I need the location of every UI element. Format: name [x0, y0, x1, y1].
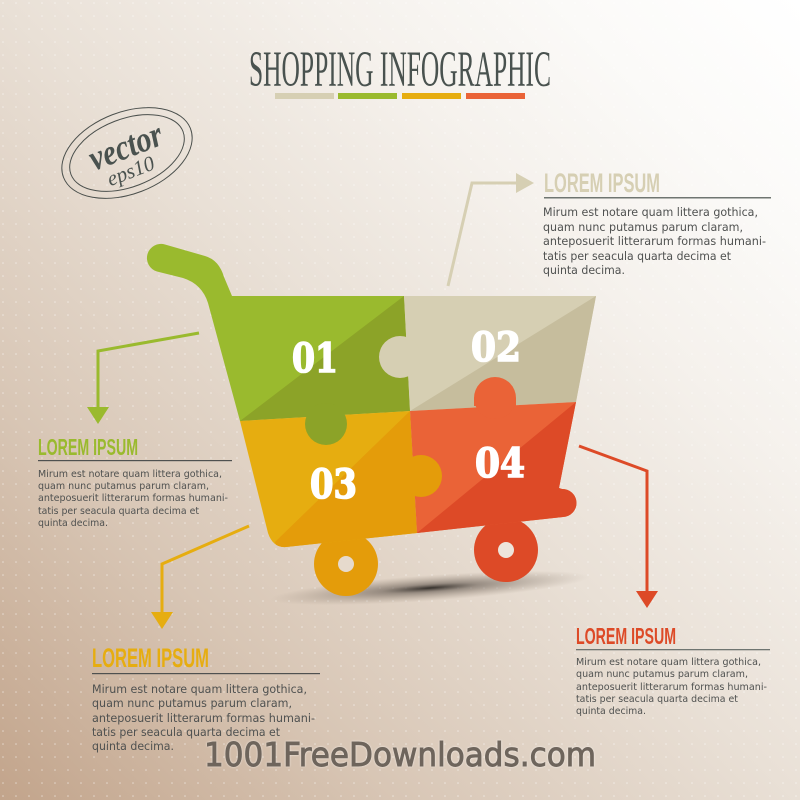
panel: beige text block: [543, 168, 771, 277]
body text: quinta decima.: [576, 706, 646, 717]
arrow: green callout: [87, 333, 199, 424]
puzzle piece 01: [146, 244, 410, 421]
body text: tatis per seacula quarta decima et: [38, 506, 199, 517]
watermark: 1001FreeDownloads.com: [204, 735, 596, 774]
body text: tatis per seacula quarta decima et: [576, 694, 738, 705]
body text: [38, 469, 228, 529]
body text: quinta decima.: [543, 263, 625, 277]
puzzle piece 04: [410, 377, 576, 533]
puzzle piece 02: [379, 290, 600, 415]
body text: anteposuerit litterarum formas humani-: [576, 682, 767, 693]
arrow: red callout: [579, 446, 658, 608]
body text: quam nunc putamus parum claram,: [92, 696, 292, 710]
wheel: red: [474, 518, 538, 582]
title colour bars: [275, 93, 525, 99]
body text: Mirum est notare quam littera gothica,: [92, 682, 307, 696]
heading: LOREM IPSUM: [576, 623, 676, 649]
panel: red text block: [576, 623, 770, 717]
arrow: beige callout: [448, 173, 534, 286]
number 02: 02: [471, 324, 521, 371]
puzzle piece 03: [240, 411, 417, 548]
badge: vector eps10: eps10: [103, 151, 158, 191]
body text: Mirum est notare quam littera gothica,: [543, 205, 758, 219]
body text: [543, 205, 766, 277]
number 01: 01: [292, 335, 338, 382]
body text: Mirum est notare quam littera gothica,: [38, 469, 222, 480]
body text: quinta decima.: [92, 739, 174, 753]
number 04: 04: [475, 440, 525, 487]
arrow: yellow callout: [151, 526, 249, 629]
body text: tatis per seacula quarta decima et: [92, 725, 280, 739]
heading: LOREM IPSUM: [544, 168, 660, 198]
body text: [92, 682, 315, 753]
number 03: 03: [310, 461, 357, 508]
panel: yellow text block: [92, 643, 320, 753]
badge: vector eps10: vector: [83, 114, 169, 178]
panel: green text block: [38, 434, 232, 529]
body text: anteposuerit litterarum formas humani-: [543, 234, 766, 248]
body text: quam nunc putamus parum claram,: [576, 669, 748, 680]
heading: LOREM IPSUM: [38, 434, 138, 460]
cart shadow: [269, 564, 591, 612]
body text: anteposuerit litterarum formas humani-: [92, 711, 315, 725]
body text: quinta decima.: [38, 518, 108, 529]
body text: anteposuerit litterarum formas humani-: [38, 493, 228, 504]
body text: quam nunc putamus parum claram,: [38, 481, 209, 492]
shopping cart: [140, 235, 600, 596]
body text: [576, 657, 767, 717]
wheel: yellow: [314, 532, 378, 596]
heading: LOREM IPSUM: [92, 643, 209, 673]
body text: tatis per seacula quarta decima et: [543, 249, 731, 263]
body text: quam nunc putamus parum claram,: [543, 220, 743, 234]
badge: vector eps10: [49, 90, 205, 216]
body text: Mirum est notare quam littera gothica,: [576, 657, 761, 668]
